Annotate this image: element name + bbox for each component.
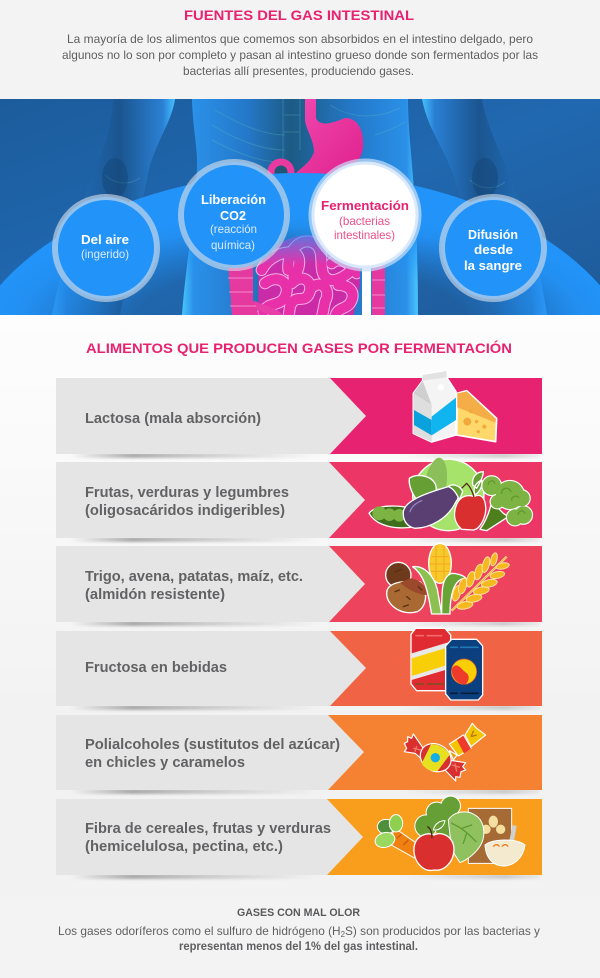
left arm	[52, 99, 175, 315]
circle: difusión: Difusión	[468, 227, 518, 242]
circle: fermentación: (bacterias	[339, 214, 390, 228]
title: FUENTES DEL GAS INTESTINAL	[184, 7, 414, 23]
panel: body illustration with gas sources	[0, 99, 600, 315]
footer text	[58, 924, 540, 953]
white stem	[362, 268, 371, 315]
circle: liberación CO2: química)	[211, 238, 255, 252]
row: polialcoholes: en chicles y caramelos	[85, 754, 245, 771]
circle: liberación CO2	[181, 162, 287, 268]
dark elbow shadows	[102, 158, 128, 198]
circle: fermentación: Fermentación	[321, 198, 409, 213]
row: fibra: (hemicelulosa, pectina, etc.)	[85, 838, 283, 855]
footer text: representan menos del 1% del gas intestinal.	[179, 939, 418, 953]
intestines	[255, 235, 360, 318]
row: fructosa	[56, 628, 542, 710]
duodenum ring	[271, 162, 291, 182]
stomach	[292, 99, 363, 178]
icon: carrot, lettuce, apple and cereal	[373, 797, 525, 870]
row: trigo: Trigo, avena, patatas, maíz, etc.	[85, 568, 303, 585]
torso	[182, 99, 418, 315]
right arm	[422, 99, 547, 315]
heading: foods: ALIMENTOS QUE PRODUCEN GASES POR FERMENTACIÓN	[86, 339, 512, 356]
icon: milk and cheese	[413, 371, 497, 442]
circle: difusión: la sangre	[464, 258, 522, 273]
circle: del aire: (ingerido)	[81, 247, 129, 261]
row: trigo	[56, 543, 542, 626]
circle: del aire	[55, 197, 157, 299]
icon: drink cans	[411, 628, 483, 700]
rib lines	[105, 99, 505, 188]
blue arc	[0, 173, 600, 315]
row: lactosa: Lactosa (mala absorción)	[85, 410, 261, 427]
circle: difusión: desde	[474, 242, 513, 257]
row: frutas: Frutas, verduras y legumbres	[85, 484, 289, 501]
intro text: algunos no lo son por completo y pasan al intestino grueso donde son fermentados por las	[62, 48, 538, 62]
icon: vegetables	[369, 458, 532, 531]
row: frutas	[56, 458, 542, 542]
row: polialcoholes: Polialcoholes (sustitutos del azúcar)	[85, 736, 340, 753]
circle: fermentación: intestinales)	[334, 228, 395, 242]
footer heading: GASES CON MAL OLOR	[237, 907, 360, 919]
circle: liberación CO2: (reacción	[210, 222, 257, 236]
intro text: La mayoría de los alimentos que comemos son absorbidos en el intestino delgado, pero	[67, 32, 533, 46]
circle: liberación CO2: CO2	[220, 208, 246, 223]
footer text: Los gases odoríferos como el sulfuro de hidrógeno (H	[58, 924, 344, 938]
row: frutas: (oligosacáridos indigeribles)	[85, 502, 285, 519]
circle: del aire: Del aire	[81, 232, 129, 247]
intro text: bacterias allí presentes, produciendo gases.	[183, 64, 414, 78]
row: polialcoholes	[56, 715, 542, 794]
colon left	[228, 263, 259, 316]
footer text: S) son producidos por las bacterias y	[345, 924, 540, 938]
icon: potatoes, corn and wheat	[386, 543, 510, 614]
icon: candies	[404, 723, 486, 781]
row: lactosa	[56, 371, 542, 458]
colon right	[372, 262, 385, 317]
row: fibra: Fibra de cereales, frutas y verduras	[85, 820, 331, 837]
circle: difusión	[442, 197, 544, 299]
footer text: 2	[341, 930, 346, 939]
row: fibra	[56, 797, 542, 879]
circle: fermentación	[312, 162, 418, 268]
circle: liberación CO2: Liberación	[201, 192, 266, 207]
row: fructosa: Fructosa en bebidas	[85, 659, 227, 676]
intro text	[62, 32, 538, 78]
row: trigo: (almidón resistente)	[85, 586, 225, 603]
